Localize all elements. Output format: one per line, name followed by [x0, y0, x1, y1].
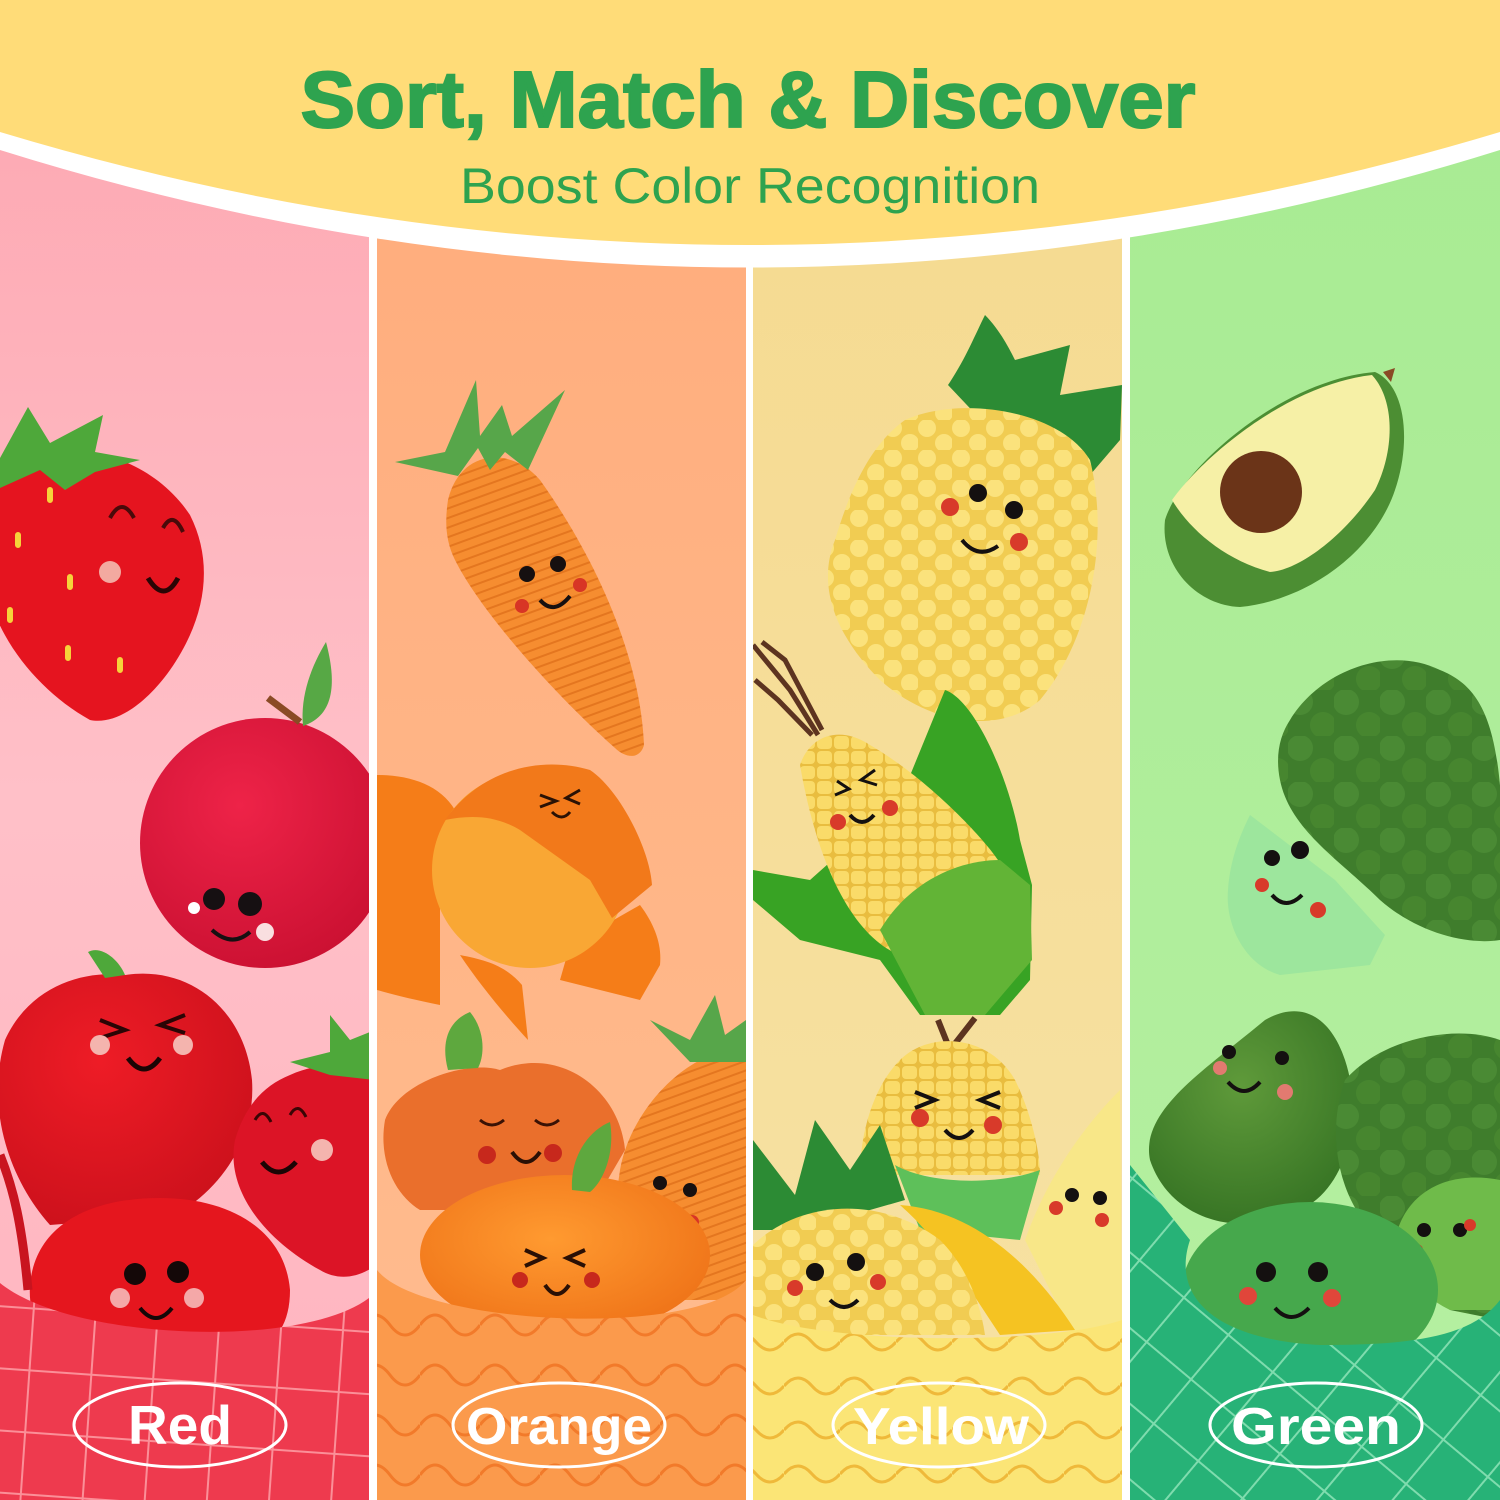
subtitle: Boost Color Recognition	[460, 158, 1040, 214]
toy: tomato	[30, 1198, 290, 1332]
toy: watermelon	[1186, 1202, 1438, 1345]
label: Red: Red	[128, 1394, 232, 1456]
toy: broccoli in basket	[1336, 1033, 1500, 1320]
toy: carrot in basket	[617, 995, 746, 1300]
label: Orange: Orange	[466, 1398, 652, 1456]
basket: green	[1130, 1165, 1500, 1500]
toy: banana	[900, 1090, 1122, 1340]
label: Orange	[453, 1383, 665, 1467]
toy: corn with husk	[753, 642, 1032, 1015]
toy: strawberry	[0, 407, 204, 721]
toy: pineapple	[828, 315, 1122, 721]
panel: yellow column	[753, 100, 1122, 1500]
basket handle: red	[0, 1155, 28, 1290]
basket: orange	[377, 1270, 746, 1500]
toy: red apple	[140, 642, 390, 968]
label: Red	[74, 1383, 286, 1467]
toy: whole avocado	[1149, 1011, 1353, 1224]
toy: carrot	[395, 380, 644, 756]
panel: red column	[0, 150, 369, 1500]
toy: small strawberry	[234, 1015, 369, 1277]
label: Yellow	[833, 1383, 1045, 1467]
basket: yellow	[753, 1315, 1122, 1500]
panel: orange column	[377, 100, 746, 1500]
label: Green: Green	[1231, 1398, 1401, 1456]
label: Green	[1210, 1383, 1422, 1467]
basket: red	[0, 1283, 369, 1500]
toy: red bell pepper	[0, 950, 252, 1225]
header banner	[0, 0, 1500, 268]
toy: orange pumpkin back	[383, 1012, 625, 1210]
toy: small corn	[860, 1018, 1040, 1240]
label: Yellow: Yellow	[853, 1398, 1030, 1456]
toy: peeled tangerine	[377, 764, 660, 1040]
toy: avocado half	[1165, 368, 1404, 607]
toy: broccoli	[1228, 660, 1500, 975]
toy: small pineapple	[753, 1120, 985, 1335]
panel: green column	[1130, 100, 1500, 1500]
title: Sort, Match & Discover	[300, 55, 1196, 144]
toy: orange pumpkin front	[420, 1122, 710, 1335]
